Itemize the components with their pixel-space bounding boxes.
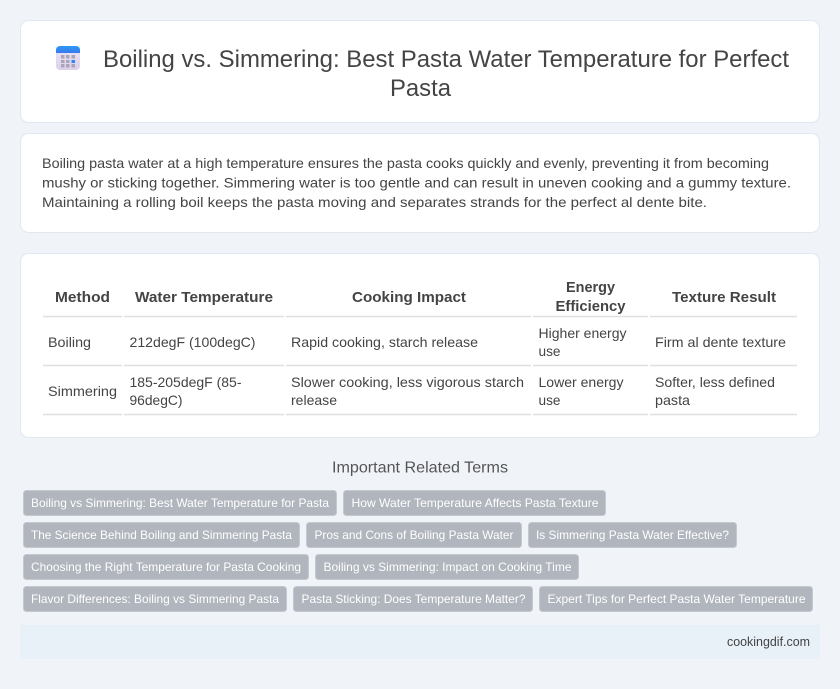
tag	[24, 522, 300, 548]
table row: simmering: Simmering	[48, 383, 117, 399]
table row: boiling: 212degF (100degC)	[130, 334, 256, 350]
table row: simmering: Slower cooking, less vigorous starch	[291, 374, 524, 390]
tag: Boiling vs Simmering: Impact on Cooking Time	[324, 560, 572, 574]
text block: introduction: Boiling pasta water at a high temperature ensures the pasta cooks quickly and evenly, preventing it from becoming	[42, 155, 769, 171]
table row: boiling: use	[538, 343, 561, 359]
tag: Expert Tips for Perfect Pasta Water Temperature	[548, 592, 806, 606]
footer source text: cookingdif.com	[727, 634, 810, 649]
panel: introduction paragraph	[20, 134, 820, 232]
table row: simmering	[48, 374, 775, 408]
tag: Flavor Differences: Boiling vs Simmering Pasta	[31, 592, 279, 606]
title: Pasta	[390, 75, 452, 102]
text block: introduction: Maintaining a rolling boil keeps the pasta moving and separates strands for the perfect al dente bite.	[42, 194, 707, 210]
table header row: Energy	[566, 279, 616, 296]
title: Boiling vs. Simmering: Best Pasta Water Temperature for Perfect	[103, 46, 789, 73]
table header row: Cooking Impact	[352, 289, 466, 306]
tag: Choosing the Right Temperature for Pasta Cooking	[31, 560, 301, 574]
tag	[316, 554, 578, 580]
tag: How Water Temperature Affects Pasta Texture	[352, 496, 599, 510]
table header row: Method	[55, 289, 110, 306]
panel: title header	[20, 20, 820, 122]
table row: boiling: Higher energy	[538, 325, 626, 341]
table row: simmering: Softer, less defined	[655, 374, 775, 390]
table row: boiling: Boiling	[48, 334, 91, 350]
table row: boiling	[48, 325, 786, 359]
tag	[294, 586, 532, 612]
tag: Boiling vs Simmering: Best Water Temperature for Pasta	[31, 496, 329, 510]
panel: comparison table	[20, 254, 820, 438]
table row: simmering: 185-205degF (85-	[130, 374, 242, 390]
tag	[24, 490, 336, 516]
tag	[528, 522, 736, 548]
table header row	[55, 279, 776, 315]
table header row: Efficiency	[556, 298, 626, 315]
table row: simmering: release	[291, 392, 337, 408]
tag: Pasta Sticking: Does Temperature Matter?	[302, 592, 526, 606]
table row: simmering: Lower energy	[538, 374, 624, 390]
tag	[306, 522, 522, 548]
tag: The Science Behind Boiling and Simmering Pasta	[31, 528, 292, 542]
table row: boiling: Rapid cooking, starch release	[291, 334, 478, 350]
tag	[344, 490, 606, 516]
heading: related terms: Important Related Terms	[332, 460, 508, 476]
table row: boiling: Firm al dente texture	[655, 334, 786, 350]
text block: introduction: mushy or sticking together. Simmering water is too gentle and can result in uneven cooking and a gummy texture.	[42, 174, 791, 190]
table row: simmering: 96degC)	[130, 392, 182, 408]
footer bar	[20, 625, 820, 659]
table header row: Texture Result	[672, 289, 776, 306]
icon: calendar	[56, 46, 80, 70]
tag list: related terms	[24, 490, 812, 612]
table header row: Water Temperature	[135, 289, 273, 306]
tag	[24, 586, 286, 612]
tag: Pros and Cons of Boiling Pasta Water	[314, 528, 514, 542]
tag	[24, 554, 308, 580]
tag: Is Simmering Pasta Water Effective?	[536, 528, 729, 542]
table row: simmering: use	[538, 392, 561, 408]
table row: simmering: pasta	[655, 392, 690, 408]
tag	[540, 586, 812, 612]
